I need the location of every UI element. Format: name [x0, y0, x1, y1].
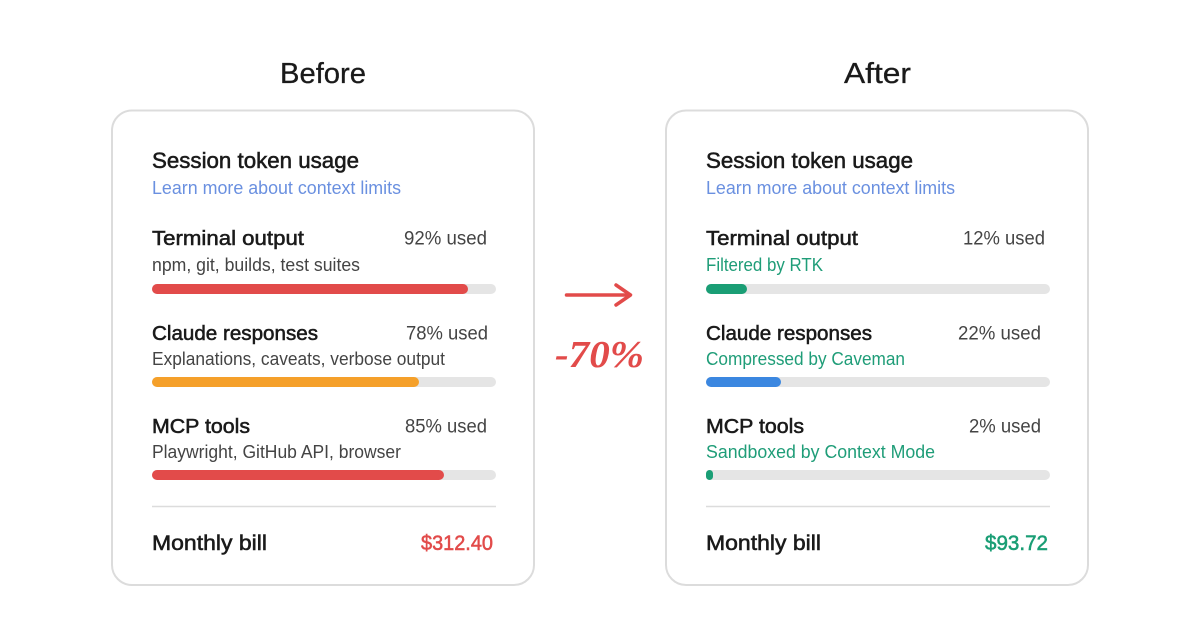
- row: mcp tools: [152, 415, 496, 480]
- row: terminal output: [706, 227, 1050, 294]
- row: mcp tools: Sandboxed by Context Mode: [706, 442, 935, 462]
- row: mcp tools: 85% used: [405, 416, 487, 438]
- reduction label: -70%: [555, 334, 644, 376]
- row: terminal output: Terminal output: [706, 227, 858, 250]
- row: claude responses: Explanations, caveats, verbose output: [152, 349, 445, 369]
- monthly bill: Monthly bill: [706, 532, 821, 555]
- link: Learn more about context limits: [706, 178, 955, 198]
- monthly bill: $312.40: [421, 532, 493, 555]
- row: claude responses: Claude responses: [152, 322, 318, 345]
- row: terminal output: Filtered by RTK: [706, 255, 823, 275]
- panel title: Session token usage: [152, 148, 359, 173]
- row: terminal output: npm, git, builds, test suites: [152, 255, 360, 275]
- row: claude responses: Compressed by Caveman: [706, 349, 905, 369]
- panel: after: [666, 110, 1088, 585]
- arrow: [566, 285, 630, 305]
- row: claude responses: 78% used: [406, 324, 488, 344]
- row: terminal output: Terminal output: [152, 227, 304, 250]
- row: terminal output: 12% used: [963, 228, 1045, 250]
- monthly bill: $93.72: [985, 532, 1048, 555]
- row: claude responses: Claude responses: [706, 322, 872, 345]
- link: Learn more about context limits: [152, 178, 401, 198]
- row: terminal output: [152, 227, 496, 294]
- row: claude responses: [152, 322, 496, 387]
- heading: After: After: [844, 58, 911, 90]
- row: terminal output: 92% used: [404, 228, 487, 250]
- panel title: Session token usage: [706, 148, 913, 173]
- row: claude responses: 22% used: [958, 324, 1041, 344]
- row: mcp tools: MCP tools: [706, 415, 804, 438]
- heading: Before: Before: [280, 58, 366, 90]
- row: mcp tools: MCP tools: [152, 415, 250, 438]
- monthly bill: Monthly bill: [152, 532, 267, 555]
- row: mcp tools: Playwright, GitHub API, browser: [152, 442, 401, 462]
- monthly bill: [706, 532, 1048, 555]
- panel: before: [112, 110, 534, 585]
- row: mcp tools: 2% used: [969, 416, 1041, 438]
- row: mcp tools: [706, 415, 1050, 480]
- row: claude responses: [706, 322, 1050, 387]
- monthly bill: [152, 532, 493, 555]
